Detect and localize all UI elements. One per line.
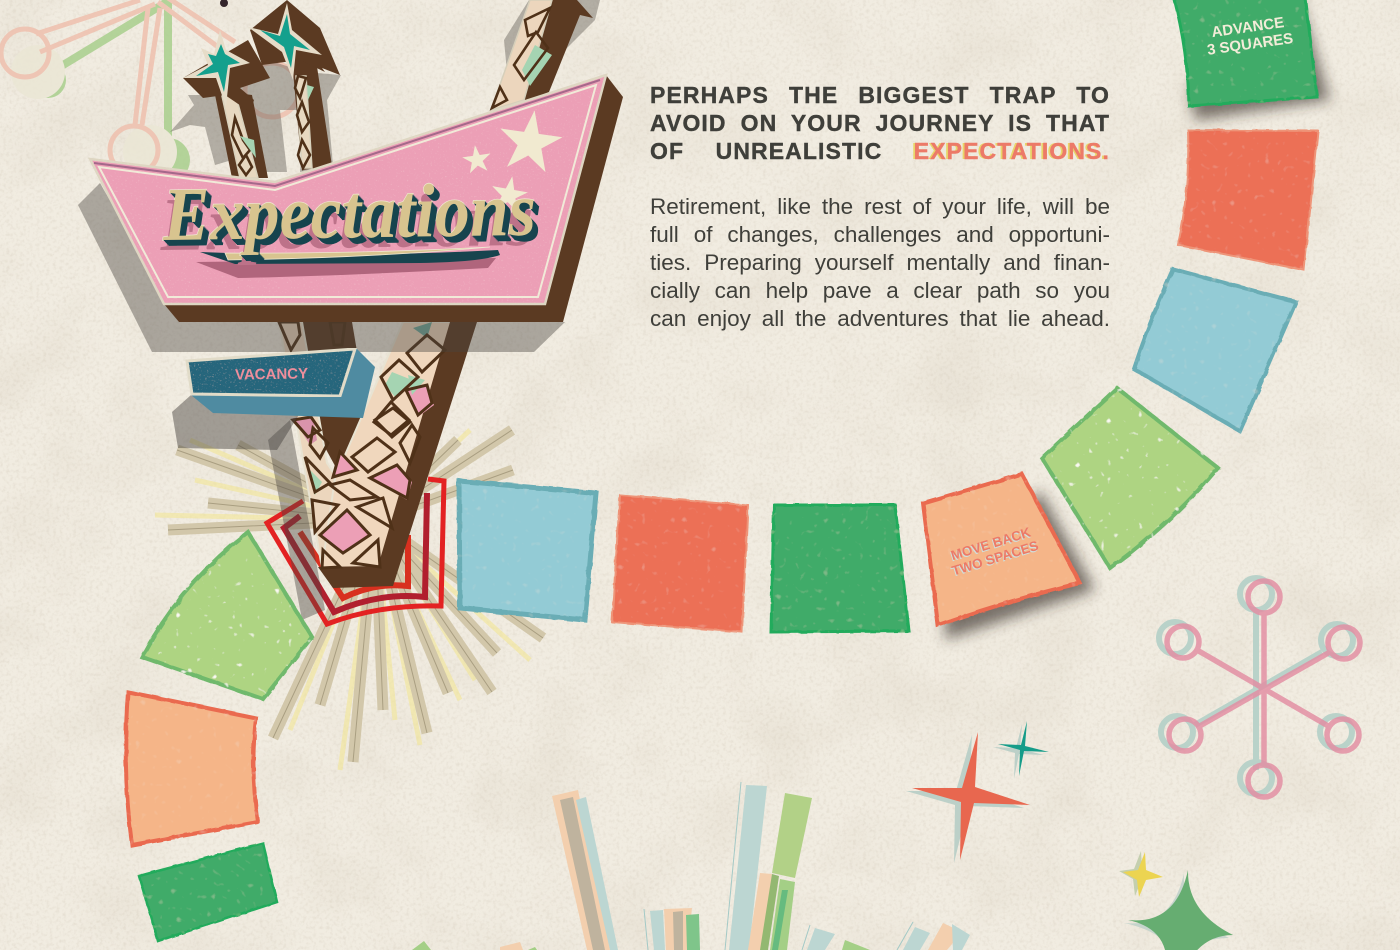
- square: green bottom: [139, 843, 277, 941]
- body text: can enjoy all the adventures that lie ahead.: [650, 306, 1110, 331]
- lower right slab cream: [322, 322, 452, 568]
- swoosh shadow: [196, 258, 496, 278]
- square label: advance 3 squares: 3 SQUARES: [1206, 30, 1294, 59]
- star: teal right: [248, 3, 322, 80]
- square: orange left: [126, 692, 258, 845]
- sparkle: green: [1124, 870, 1233, 950]
- coloured patches: [293, 322, 434, 553]
- palm leaves brown: [183, 40, 270, 112]
- heading: PERHAPS THE BIGGEST TRAP TO: [650, 82, 1110, 108]
- sparkle: yellow: [1119, 851, 1163, 897]
- diamond outlines: [279, 322, 445, 568]
- star: teal left: [183, 30, 250, 107]
- pole: brown faces: [214, 90, 268, 178]
- square: red 1: [612, 495, 748, 632]
- heading: AVOID ON YOUR JOURNEY IS THAT: [650, 110, 1110, 136]
- sign top line: [94, 80, 600, 186]
- square: red right: [1178, 130, 1318, 270]
- body text: cially can help pave a clear path so you: [650, 278, 1110, 303]
- vacancy sign: [172, 348, 375, 450]
- top marker: [220, 0, 228, 7]
- sign title: Expectations: [162, 168, 536, 257]
- square: green 1: [771, 505, 909, 632]
- square shadow: advance: [1190, 0, 1330, 120]
- body text: Retirement, like the rest of your life, will be: [650, 194, 1110, 219]
- atom pink layer: [1167, 581, 1360, 797]
- sparkle: teal: [993, 721, 1049, 779]
- vacancy shadow: [172, 395, 300, 450]
- square label: advance 3 squares: [1206, 14, 1294, 59]
- decorative atom: right: [1159, 578, 1360, 797]
- starburst rays behind the sign post: [155, 430, 543, 770]
- decorative atom: top left: [1, 0, 299, 182]
- square label: move back two spaces: TWO SPACES: [950, 538, 1040, 578]
- atom teal layer: [1159, 578, 1353, 794]
- square: advance: [1173, 0, 1317, 106]
- palm shadows: [170, 0, 600, 172]
- sign depth: [164, 75, 623, 322]
- square: blue 1: [459, 481, 596, 620]
- pole shadow strip: [268, 420, 325, 620]
- square label: move back two spaces: MOVE BACK: [949, 525, 1032, 563]
- upper section cream: [491, 0, 552, 110]
- vacancy depth: [191, 348, 375, 418]
- upper section brown: [524, 0, 593, 102]
- body text: [650, 194, 1110, 331]
- vacancy front: [187, 349, 355, 396]
- body text: ties. Preparing yourself mentally and finan-: [650, 250, 1110, 275]
- square: move back: [923, 474, 1080, 625]
- big sign post: [279, 0, 593, 588]
- vacancy label: VACANCY: [235, 365, 308, 384]
- main sign shadow: [78, 183, 565, 352]
- sign stars: [461, 106, 566, 213]
- lower left slab: [279, 322, 340, 568]
- heading: OF UNREALISTIC EXPECTATIONS.: [650, 138, 1110, 164]
- pole: diamonds: [232, 76, 310, 175]
- swoosh light: [225, 247, 490, 260]
- bottom rays: [412, 782, 970, 950]
- body text: full of changes, challenges and opportuni-: [650, 222, 1110, 247]
- square shadow: move back: [945, 490, 1095, 640]
- pole: cream faces: [222, 96, 258, 178]
- square: light green right: [1042, 388, 1218, 568]
- red concentric frames: [267, 479, 444, 624]
- heading: [650, 82, 1110, 164]
- main sign: [90, 75, 623, 322]
- lower right slab brown: [318, 322, 477, 588]
- square label: advance 3 squares: ADVANCE: [1210, 14, 1285, 41]
- sign post left poles with palm stars: [183, 0, 372, 475]
- sign inset border: [99, 85, 596, 297]
- square: light green left: [142, 532, 312, 699]
- sparkle: red: [906, 732, 1030, 863]
- swoosh dark: [200, 250, 500, 264]
- square: blue right: [1134, 269, 1296, 431]
- sign face: [90, 75, 606, 304]
